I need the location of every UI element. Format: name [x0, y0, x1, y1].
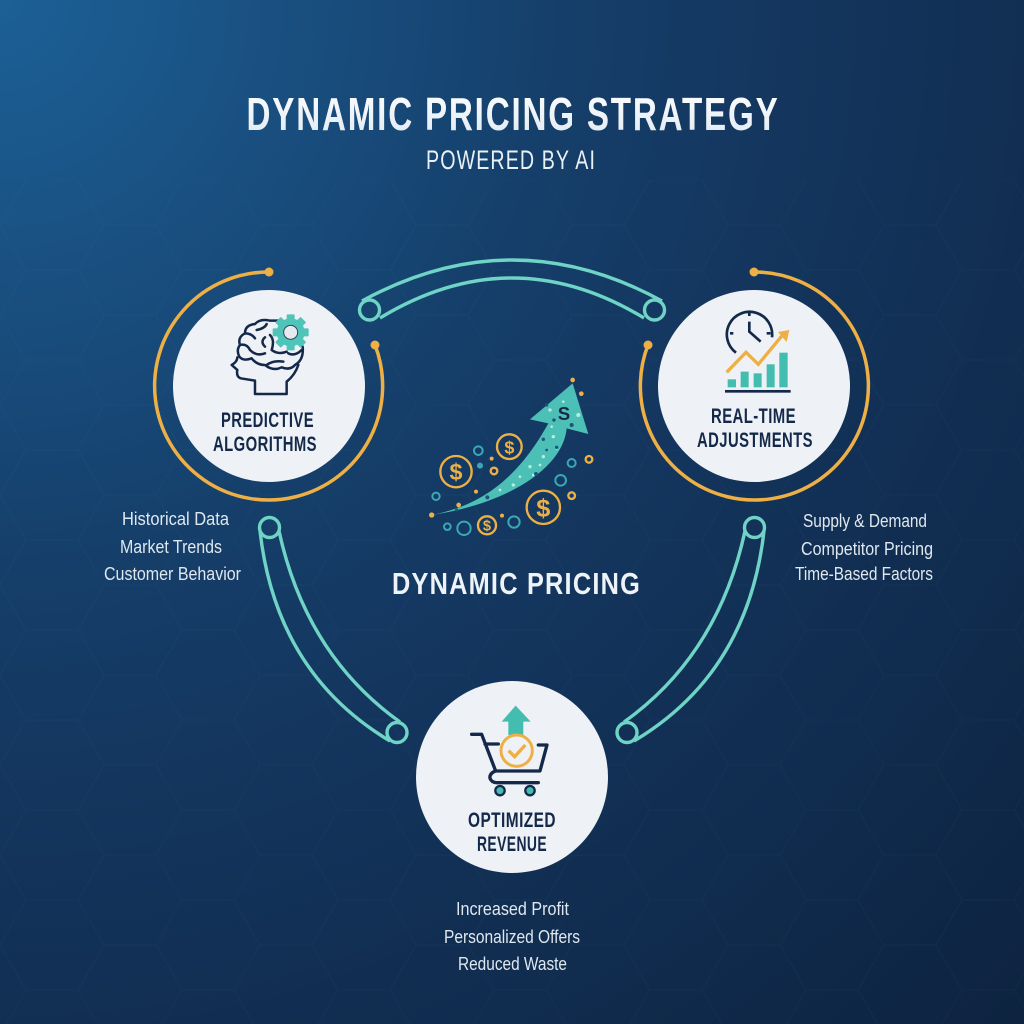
connector: left tube [260, 518, 407, 742]
text block: revenue outcomes: Personalized Offers [444, 927, 580, 947]
center: growth arrow with coins: S [558, 403, 570, 424]
text block: revenue outcomes: Increased Profit [456, 899, 569, 919]
icon: clock and rising chart [725, 312, 791, 393]
node: optimized revenue [416, 681, 608, 873]
white circle left [173, 290, 365, 482]
text block: predictive inputs: Historical Data [122, 509, 230, 529]
center: growth arrow with coins: $ [483, 519, 491, 535]
gold ring left [155, 268, 383, 500]
label: REAL-TIME [711, 405, 796, 428]
label [213, 409, 317, 456]
title: DYNAMIC PRICING STRATEGY [246, 88, 780, 140]
label [697, 405, 813, 452]
text block: real-time inputs [795, 511, 933, 584]
node: real-time adjustments [640, 268, 868, 500]
text block: revenue outcomes: Reduced Waste [458, 954, 567, 974]
text block: predictive inputs [104, 509, 241, 584]
label: ALGORITHMS [213, 433, 317, 456]
coins [440, 434, 592, 534]
white circle right [658, 290, 850, 482]
icon: brain head with gear [232, 314, 309, 394]
text block: revenue outcomes [444, 899, 580, 974]
icon: cart with arrow and check [472, 706, 547, 795]
gold ring right [640, 268, 868, 500]
center label: DYNAMIC PRICING [392, 566, 641, 601]
label: OPTIMIZED [468, 809, 556, 832]
white circle bottom [416, 681, 608, 873]
center: growth arrow with coins: $ [450, 459, 463, 485]
text block: real-time inputs: Competitor Pricing [801, 539, 933, 559]
label: ADJUSTMENTS [697, 429, 813, 452]
text block: real-time inputs: Supply & Demand [803, 511, 927, 531]
connector: top tube [360, 260, 664, 320]
center: growth arrow with coins [429, 378, 592, 535]
label: PREDICTIVE [221, 409, 314, 432]
label: REVENUE [477, 833, 547, 856]
center: growth arrow with coins: $ [504, 437, 514, 457]
connector: right tube [617, 518, 764, 742]
text block: real-time inputs: Time-Based Factors [795, 564, 933, 584]
center: growth arrow with coins: $ [536, 495, 550, 523]
node: predictive algorithms [155, 268, 383, 500]
subtitle: POWERED BY AI [426, 145, 596, 175]
text block: predictive inputs: Market Trends [120, 537, 222, 557]
text block: predictive inputs: Customer Behavior [104, 564, 241, 584]
label [468, 809, 556, 856]
arrow [432, 383, 588, 515]
